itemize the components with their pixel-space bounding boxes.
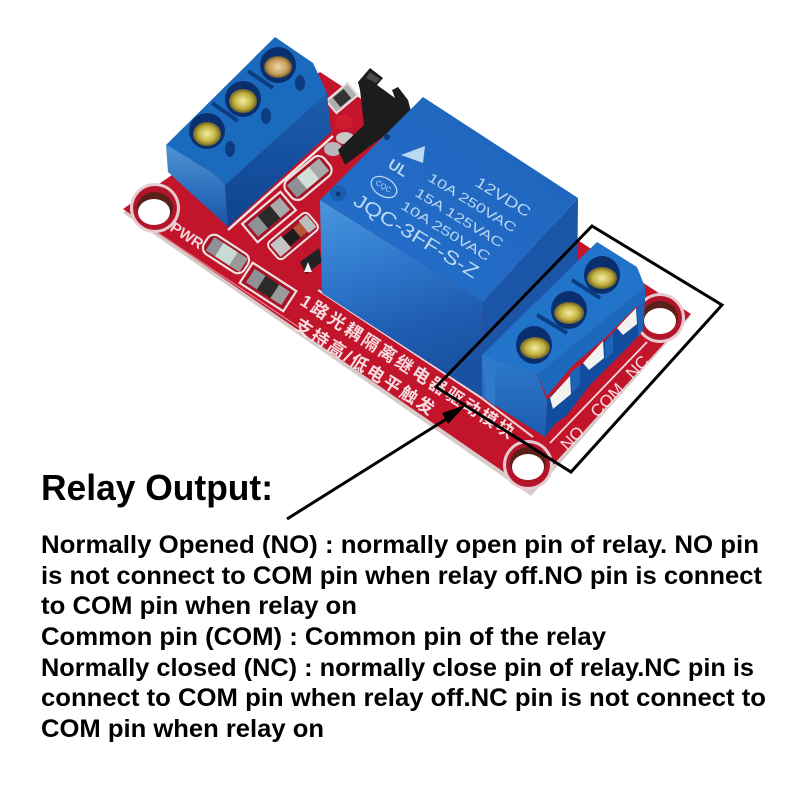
circuit board (123, 72, 691, 496)
description text: Common pin (COM) : Common pin of the relay (41, 623, 606, 651)
board silkscreen text: 支持高/低电平触发 (291, 315, 438, 419)
description text: Normally closed (NC) : normally close pin of relay.NC pin is (41, 654, 754, 682)
mounting hole right (635, 293, 685, 343)
relay markings (349, 146, 534, 283)
right screw terminal (482, 242, 645, 437)
LED (200, 232, 252, 276)
description text: to COM pin when relay on (41, 592, 357, 620)
heading: Relay Output: (41, 467, 273, 508)
resistor top (326, 83, 358, 113)
mounting hole left (130, 183, 180, 233)
SMD components (200, 83, 358, 311)
arrow to terminal (287, 405, 466, 519)
description text: Normally Opened (NO) : normally open pin of relay. NO pin (41, 531, 759, 559)
jumper (338, 68, 412, 165)
left screw terminal (166, 37, 333, 230)
highlight box around relay output terminal (436, 226, 722, 472)
resistor (240, 263, 296, 311)
terminal labels: COM (587, 379, 628, 421)
PWR label: PWR (167, 219, 206, 253)
relay markings: 10A 250VAC (425, 170, 519, 235)
diode (266, 211, 320, 261)
relay markings: 15A 125VAC (412, 185, 506, 250)
description text (41, 531, 766, 743)
terminal labels: NC (622, 352, 653, 383)
screws (189, 47, 296, 149)
screws (516, 256, 620, 364)
resistor upper (242, 192, 296, 242)
description text: COM pin when relay on (41, 715, 324, 743)
relay markings: 12VDC (472, 174, 534, 221)
terminal labels: NO (557, 423, 588, 454)
relay markings: UL (385, 156, 411, 181)
mounting hole bottom (503, 440, 553, 490)
terminal labels (557, 352, 653, 454)
board silkscreen text: 1路光耦隔离继电器驱动模块 (297, 291, 518, 442)
relay (320, 97, 578, 397)
description text: is not connect to COM pin when relay off.NO pin is connect (41, 562, 763, 590)
relay module photo (123, 37, 691, 496)
relay markings: CQC (374, 178, 393, 195)
LED upper (281, 153, 335, 203)
relay markings: 10A 250VAC (398, 198, 493, 264)
description text: connect to COM pin when relay off.NC pin is not connect to (41, 684, 766, 712)
relay markings: JQC-3FF-S-Z (349, 190, 483, 283)
contact slots (550, 308, 637, 409)
